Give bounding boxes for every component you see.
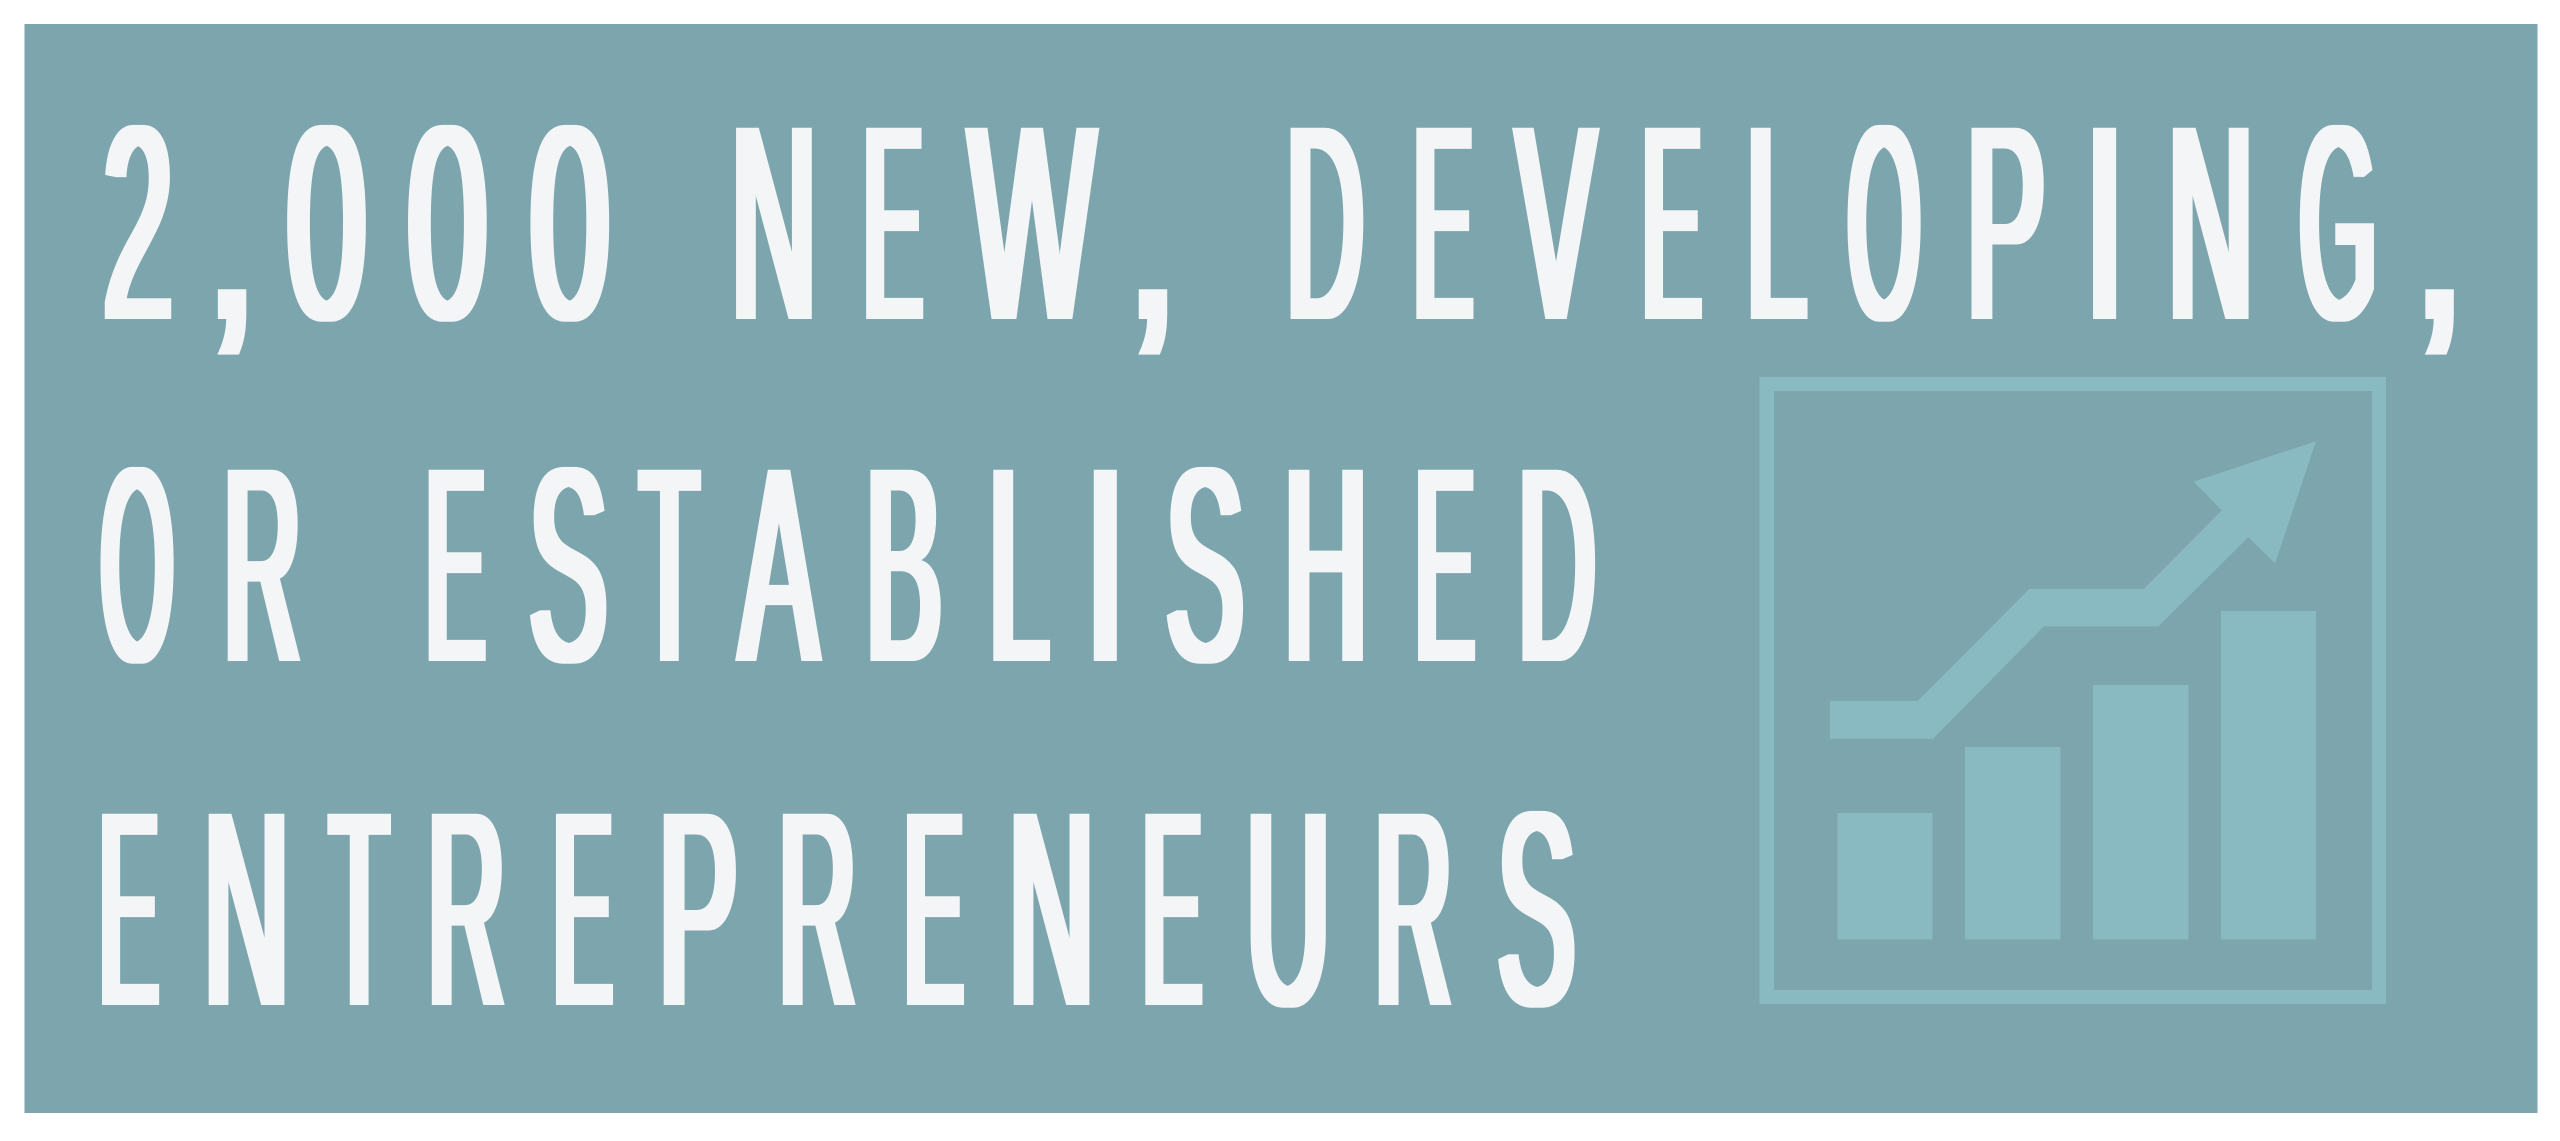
heading line 1: , (1126, 67, 1180, 378)
heading line 1: 0 (407, 67, 487, 378)
heading: 2,000 new, developing, or established entrepreneurs: D (1519, 409, 1595, 720)
heading line 2: S (1166, 409, 1243, 720)
heading line 3: U (1247, 753, 1330, 1064)
heading line 1: E (1643, 67, 1701, 378)
heading line 3: E (554, 753, 612, 1064)
heading line 2: L (990, 409, 1049, 720)
heading line 3: R (428, 753, 505, 1064)
bar 4 (2221, 611, 2316, 940)
heading line 3: N (204, 753, 289, 1064)
heading line 2: H (1284, 409, 1367, 720)
heading: 2,000 new, developing, or established entrepreneurs: S (1498, 753, 1575, 1064)
bar 3 (2093, 685, 2188, 940)
bar 1 (1838, 813, 1932, 940)
heading line 3: E (1143, 753, 1201, 1064)
heading line 1: 2 (104, 67, 172, 378)
rising arrow (1830, 441, 2316, 739)
heading line 1: O (1848, 67, 1920, 378)
heading line 2: T (640, 409, 698, 720)
heading line 1: W (969, 67, 1096, 378)
heading line 2: E (1416, 409, 1474, 720)
heading line 1: 0 (530, 67, 610, 378)
heading line 2: A (740, 409, 818, 720)
heading line 1: V (1516, 67, 1596, 378)
heading line 2: O (101, 409, 173, 720)
heading line 3: T (330, 753, 388, 1064)
icon: growth chart (1760, 377, 2386, 1004)
heading line 1: , (205, 67, 259, 378)
heading line 2: S (530, 409, 607, 720)
heading line 3: E (905, 753, 963, 1064)
heading line 1: I (2085, 67, 2124, 378)
heading line 1: N (731, 67, 816, 378)
heading line 1: E (1414, 67, 1472, 378)
heading line 1: D (1287, 67, 1363, 378)
heading line 2: E (426, 409, 484, 720)
heading line 1: E (864, 67, 922, 378)
heading line 1: 0 (286, 67, 366, 378)
heading line 1: P (1967, 67, 2045, 378)
icon frame (1760, 377, 2386, 1004)
heading line 1: L (1747, 67, 1806, 378)
heading line 2: B (866, 409, 942, 720)
heading line 3: E (100, 753, 158, 1064)
heading line 1: N (2168, 67, 2253, 378)
heading line 3: P (659, 753, 737, 1064)
heading line 2: R (224, 409, 300, 720)
heading line 1: , (2412, 67, 2466, 378)
bar 2 (1965, 747, 2060, 940)
heading line 1: G (2300, 67, 2376, 378)
heading line 3: R (1375, 753, 1452, 1064)
heading line 3: R (779, 753, 856, 1064)
heading line 3: N (1009, 753, 1094, 1064)
heading line 2: I (1086, 409, 1125, 720)
